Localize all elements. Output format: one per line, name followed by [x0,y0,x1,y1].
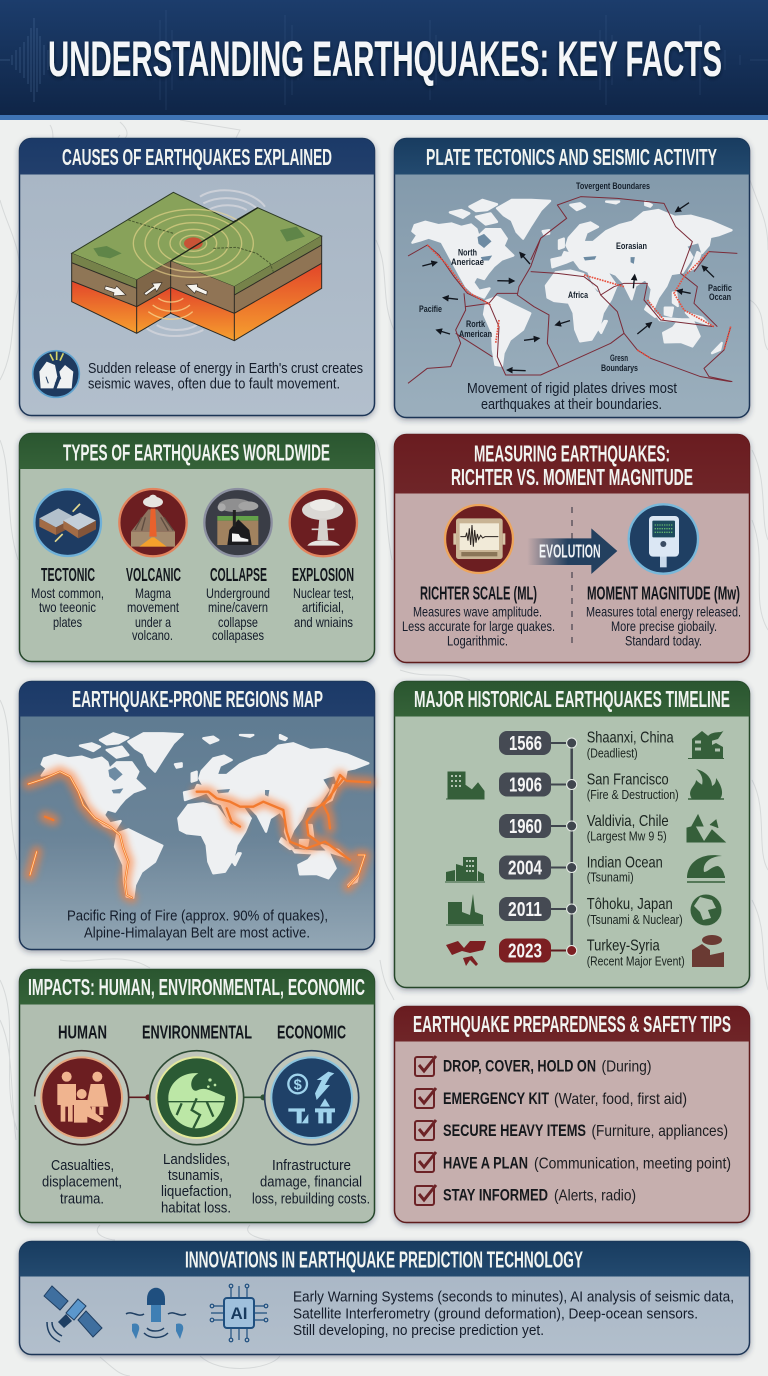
label: volcanic: under a [135,614,171,630]
entry: 1556: (Deadliest) [587,746,638,760]
description: human: displacement, [42,1174,122,1190]
label: tectonic: plates [53,614,82,630]
panel: measuring [394,434,750,662]
panel: impacts [20,970,374,1222]
heading: regions map: EARTHQUAKE-PRONE REGIONS MAP [72,686,323,712]
description: regions map [67,908,328,942]
label: explosion: EXPLOSION [292,565,354,585]
tip: stay informed: STAY INFORMED [443,1186,548,1204]
description: innovations: Early Warning Systems (seconds to minutes), AI analysis of seismic data, [293,1288,734,1306]
description: innovations: Satellite Interferometry (ground deformation), Deep-ocean sensors. [293,1306,698,1322]
panel: timeline [394,682,750,988]
icon: digital meter [629,504,698,574]
entry: 1556 [499,730,724,760]
description: plate tectonics [467,380,678,413]
icon: economic: $ [294,1077,302,1093]
heading: types: TYPES OF EARTHQUAKES WORLDWIDE [63,440,330,466]
tip: emergency kit: EMERGENCY KIT [443,1090,549,1108]
column: richter: RICHTER SCALE (ML) [420,584,537,604]
label: collapse: collapse [218,614,258,630]
entry: 1960: Valdivia, Chile [587,813,669,830]
description: human: trauma. [60,1190,104,1208]
panel: causes [20,138,374,416]
description: economic [252,1157,370,1208]
subheadings: ENVIRONMENTAL [142,1022,252,1042]
icon: volcanic [119,489,187,556]
map labels: Boundarys [601,363,638,374]
description: innovations: Still developing, no precise prediction yet. [293,1322,544,1339]
tip: have a plan [415,1152,731,1172]
label: collapse: COLLAPSE [210,565,267,585]
column: moment magnitude: Standard today. [625,632,702,648]
entry: 2023 [446,935,724,968]
map labels: Occan [709,292,731,303]
map labels: Pacifie [419,304,442,315]
label: explosion: artificial, [302,599,344,615]
entry: 1960: (Largest Mw 9 5) [587,830,667,844]
tip: emergency kit [415,1088,687,1108]
description: regions map: Alpine-Himalayan Belt are most active. [84,924,310,942]
description: causes: seismic waves, often due to fault movement. [88,376,340,392]
entry: 2004 [445,854,725,884]
subheadings [58,1022,346,1042]
label: volcanic: movement [127,599,179,615]
description: environmental: tsunamis, [168,1167,223,1184]
panel: types [20,434,374,662]
description: regions map: Pacific Ring of Fire (approx. 90% of quakes), [67,908,328,924]
entry: 2023: 2023 [508,940,542,962]
icon: explosion [290,489,357,556]
description: economic: loss, rebuilding costs. [252,1190,370,1208]
map labels: Tovergent Boundares [576,181,650,192]
world plate map [408,197,737,383]
tip: drop cover hold on: (During) [602,1058,652,1076]
entry: 2004: (Tsunami) [587,870,634,884]
label: volcanic: Magma [135,585,171,601]
label: tectonic [31,565,104,630]
panel: innovations [20,1242,750,1354]
entry: 1906 [446,769,724,802]
map labels: Pacific [708,283,732,294]
icon: environmental [150,1051,244,1145]
entry: 1906: San Francisco [587,772,669,788]
entry: 2004: Indian Ocean [587,854,663,872]
tip: secure heavy items: (Furniture, appliances) [592,1123,728,1140]
tip: secure heavy items [415,1120,728,1140]
label: explosion: Nuclear test, [293,585,354,601]
description: economic: Infrastructure [272,1157,351,1174]
tip: stay informed: (Alerts, radio) [554,1188,636,1204]
label: tectonic: Most common, [31,585,104,601]
description: causes [88,360,363,392]
entry: 1906: (Fire & Destruction) [587,788,679,802]
connectors [129,1094,266,1100]
description: causes: Sudden release of energy in Earth's crust creates [88,360,363,377]
map labels: Anericae [451,257,484,268]
column: richter [402,584,555,648]
subheadings: HUMAN [58,1022,107,1042]
heading: measuring [451,440,693,490]
icon: collapse [204,489,272,556]
label: collapse: Underground [206,585,270,601]
icon: AI chip: AI [230,1304,248,1323]
heading: impacts: IMPACTS: HUMAN, ENVIRONMENTAL, ECONOMIC [28,974,365,1000]
label: volcanic [126,565,181,643]
column: moment magnitude [586,584,741,648]
tip: emergency kit: (Water, food, first aid) [554,1091,687,1108]
world seismic belt map [28,733,370,898]
label: tectonic: two teeonic [39,599,96,615]
description: plate tectonics: Movement of rigid plates drives most [467,380,678,397]
fault block diagram [72,190,322,341]
label: tectonic: TECTONIC [41,565,95,585]
tip: stay informed [415,1185,636,1205]
map labels: Africa [568,290,589,301]
entry: 1556: 1566 [509,733,542,755]
icon: tectonic [34,489,101,556]
icon: seismograph [445,505,513,573]
description: human [42,1157,122,1208]
tip: secure heavy items: SECURE HEAVY ITEMS [443,1122,586,1140]
map labels: Rortk [466,319,486,330]
map labels: North [458,248,477,258]
entry: 2011: (Tsunami & Nuclear) [587,913,683,927]
column: richter: Measures wave amplitude. [413,604,542,620]
label: collapse [206,565,270,643]
description: environmental: habitat loss. [161,1200,231,1216]
map labels: American [459,329,492,340]
description: innovations [293,1288,734,1339]
entry: 1556: Shaanxi, China [587,730,674,746]
entry: 1960: 1960 [509,816,542,838]
arrow: evolution [527,528,617,574]
icon: economic [265,1051,359,1145]
description: environmental: liquefaction, [161,1183,232,1200]
tip: have a plan: HAVE A PLAN [443,1154,528,1172]
heading: causes: CAUSES OF EARTHQUAKES EXPLAINED [62,144,332,170]
tip: have a plan: (Communication, meeting point) [534,1156,731,1172]
map labels [419,181,732,374]
icon: AI chip [210,1284,268,1342]
title banner [0,0,768,120]
map labels: Eorasian [616,241,647,252]
description: environmental [161,1151,232,1216]
entry: 2011 [446,894,722,927]
entry: 1960 [499,813,725,844]
entry: 2011: 2011 [508,899,542,921]
label: volcanic: VOLCANIC [126,565,181,585]
subheadings: ECONOMIC [277,1022,346,1042]
label: explosion: and wniains [294,614,353,630]
arrow: evolution: EVOLUTION [539,541,601,562]
description: human: Casualties, [51,1157,114,1174]
label: collapse: mine/cavern [208,599,268,615]
column: richter: Logarithmic. [447,632,508,648]
icon: ocean sensor [126,1288,186,1339]
label: collapse: collapases [212,627,264,643]
entry: 2004: 2004 [508,858,543,880]
column: moment magnitude: More precise giobaily. [611,618,717,634]
column: richter: Less accurate for large quakes. [402,618,555,634]
entry: 2023: (Recent Major Event) [587,954,685,968]
entry: 2023: Turkey-Syria [587,938,660,954]
panel: plate tectonics [394,138,750,418]
entry: 2011: Tôhoku, Japan [587,896,673,913]
icon: satellite [44,1286,102,1342]
panel: preparedness [394,1006,750,1222]
panel: regions map [20,682,374,950]
map labels: Gresn [610,353,628,364]
entry: 1906: 1906 [509,774,542,796]
label: explosion [292,565,354,630]
label: volcanic: volcano. [132,627,173,643]
icon: human [35,1051,129,1145]
tip: drop cover hold on: DROP, COVER, HOLD ON [443,1058,596,1076]
description: economic: damage, financial [260,1174,362,1190]
description: plate tectonics: earthquakes at their boundaries. [481,396,662,413]
icon: cracked rock [33,351,79,397]
description: environmental: Landslides, [163,1151,230,1168]
